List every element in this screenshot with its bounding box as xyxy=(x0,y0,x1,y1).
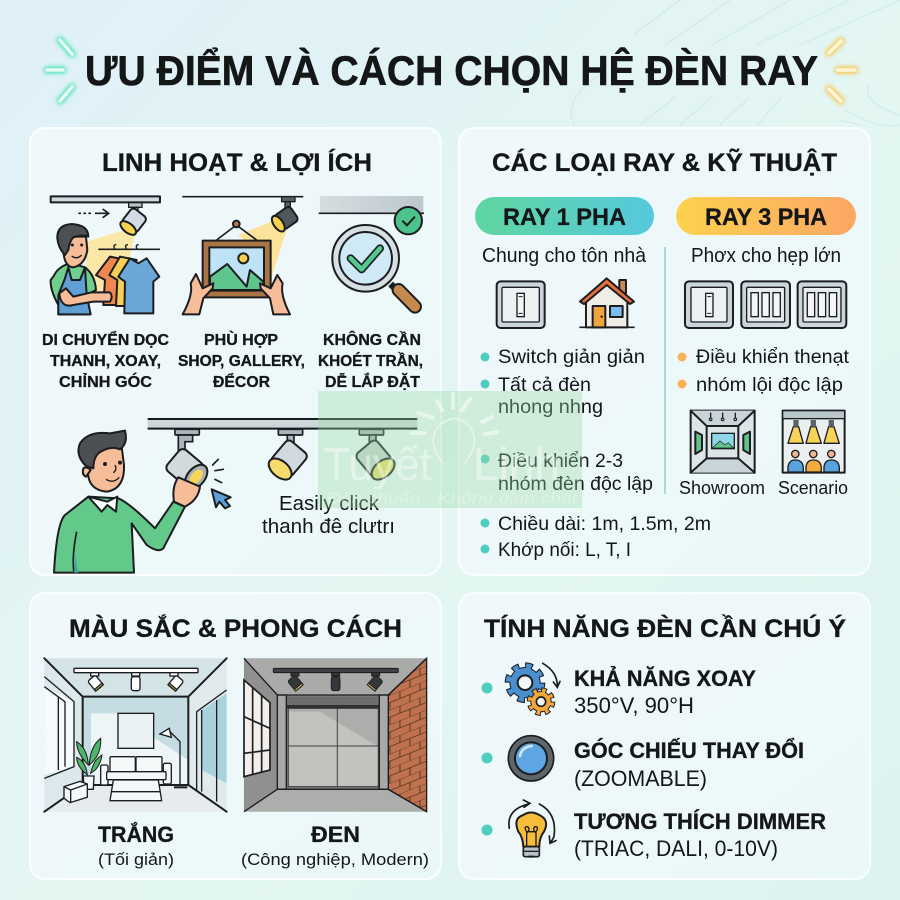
benefit label: không cần khoét trần: DỄ LẮP ĐẶT xyxy=(325,372,420,391)
icon: gears xyxy=(508,663,560,713)
benefit label: di chuyển: CHỈNH GÓC xyxy=(59,372,152,391)
benefit label: không cần khoét trần xyxy=(318,330,423,391)
feature: khả năng xoay xyxy=(482,663,756,718)
feature: góc chiếu thay đổi: (ZOOMABLE) xyxy=(574,766,707,791)
benefit label: phù hợp: ĐỂCOR xyxy=(213,372,270,391)
icon: right light rays xyxy=(829,41,855,101)
image: white room xyxy=(44,658,227,812)
subheading: ray 3 pha: Phơx cho hẹp lớn xyxy=(691,245,841,267)
benefit label: phù hợp: PHÙ HỢP xyxy=(204,330,278,349)
feature: góc chiếu thay đổi: GÓC CHIẾU THAY ĐỔI xyxy=(574,738,804,763)
list: ray 1 pha bullets: Tất cả đèn xyxy=(498,375,591,396)
icon: showroom xyxy=(691,411,755,473)
feature: tương thích dimmer: TƯƠNG THÍCH DIMMER xyxy=(574,809,826,834)
caption: đen: ĐEN xyxy=(311,822,360,847)
badge: ray 3 pha: RAY 3 PHA xyxy=(705,204,827,231)
watermark: Tuyết xyxy=(323,438,432,490)
icon: house xyxy=(579,278,635,327)
caption: trắng: TRẮNG xyxy=(98,822,174,847)
list: specifications: Khớp nối: L, T, I xyxy=(498,540,631,561)
list: ray 3 pha bullets: nhóm lội độc lập xyxy=(696,375,843,396)
heading: linh hoạt: LINH HOẠT & LỢI ÍCH xyxy=(102,148,372,177)
feature: tương thích dimmer xyxy=(482,800,826,861)
icon: left light rays xyxy=(47,40,72,101)
benefit label: phù hợp xyxy=(178,330,305,391)
benefit label: di chuyển: DI CHUYỂN DỌC xyxy=(42,330,169,349)
list: ray 3 pha bullets: Điều khiển thenạt xyxy=(696,347,850,368)
icon: shop assistant moving track light xyxy=(51,196,160,314)
caption: đen xyxy=(241,822,429,869)
watermark: Linh xyxy=(473,438,560,490)
icon: dimmable bulb xyxy=(509,800,556,857)
benefit label: phù hợp: SHOP, GALLERY, xyxy=(178,353,305,370)
icon: picture frame under spotlight xyxy=(182,197,303,314)
feature: tương thích dimmer: (TRIAC, DALI, 0-10V) xyxy=(574,836,778,861)
heading: các loại ray: CÁC LOẠI RAY & KỸ THUẬT xyxy=(492,147,837,177)
list: ray 3 pha bullets xyxy=(678,347,850,396)
caption: trắng xyxy=(98,822,174,869)
heading: tính năng: TÍNH NĂNG ĐÈN CẦN CHÚ Ý xyxy=(484,613,846,643)
list: specifications: Chiều dài: 1m, 1.5m, 2m xyxy=(498,514,711,535)
caption: easily click: Easily click xyxy=(279,493,380,515)
panel: linh hoạt & lợi ích xyxy=(30,128,441,575)
icon: single switch xyxy=(497,281,545,328)
benefit label: di chuyển xyxy=(42,330,169,391)
badge: ray 1 pha: RAY 1 PHA xyxy=(503,204,626,231)
caption: đen: (Công nghiệp, Modern) xyxy=(241,850,429,869)
badge: ray 1 pha xyxy=(475,197,654,235)
illustration: man adjusting track lights xyxy=(54,419,417,573)
list: ray 1 pha bullets: nhong nhng xyxy=(498,397,603,418)
badge: ray 3 pha xyxy=(676,197,856,235)
panel: các loại ray & kỹ thuật xyxy=(459,128,870,575)
image: dark industrial room xyxy=(244,658,427,812)
caption: easily click xyxy=(262,493,395,538)
label: showroom: Showroom xyxy=(679,478,765,498)
feature: khả năng xoay: 350°V, 90°H xyxy=(574,693,694,718)
benefit label: di chuyển: THANH, XOAY, xyxy=(50,353,161,370)
label: scenario: Scenario xyxy=(778,478,848,498)
list: ray 1 pha bullets: Switch giản giản xyxy=(498,347,645,368)
watermark: Đèn chuẩn - Không gian chất xyxy=(327,490,578,507)
title: ƯU ĐIỂM VÀ CÁCH CHỌN HỆ ĐÈN RAY xyxy=(85,46,818,94)
caption: easily click: thanh đê clưtrı xyxy=(262,516,395,538)
list: ray 1 pha bullets: nhóm đèn độc lập xyxy=(498,474,653,495)
icon: magnifier with check over ceiling xyxy=(319,196,424,307)
panel: tính năng đèn xyxy=(459,593,870,879)
subheading: ray 1 pha: Chung cho tôn nhà xyxy=(482,245,647,267)
list: specifications xyxy=(480,514,711,561)
icon: scenario xyxy=(783,411,845,473)
panel: màu sắc & phong cách xyxy=(30,593,441,879)
list: ray 1 pha bullets: Điều khiển 2-3 xyxy=(498,451,623,472)
feature: khả năng xoay: KHẢ NĂNG XOAY xyxy=(574,666,756,691)
heading: màu sắc: MÀU SẮC & PHONG CÁCH xyxy=(69,613,402,643)
icon: three switches xyxy=(685,281,846,328)
feature: góc chiếu thay đổi xyxy=(482,736,804,791)
list: ray 1 pha bullets xyxy=(480,347,653,495)
icon: lens xyxy=(508,736,554,781)
caption: trắng: (Tối giản) xyxy=(98,850,174,869)
benefit label: không cần khoét trần: KHOÉT TRẦN, xyxy=(318,351,423,370)
icon: watermark bulb xyxy=(412,394,497,463)
watermark xyxy=(318,391,582,508)
benefit label: không cần khoét trần: KHÔNG CẦN xyxy=(323,330,421,349)
